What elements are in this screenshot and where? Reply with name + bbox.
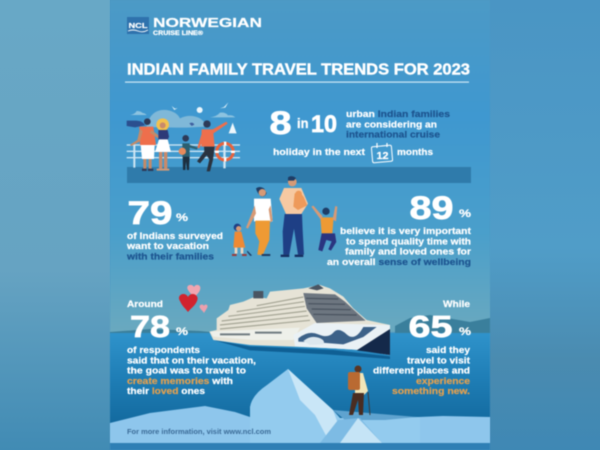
balcony lines xyxy=(220,297,357,329)
blurred left backdrop xyxy=(0,0,110,450)
hiker jacket xyxy=(355,373,368,395)
logo tagline: CRUISE LINE® xyxy=(153,30,204,37)
stat description: family and loved ones for xyxy=(345,246,471,258)
percent sign: % xyxy=(176,326,188,338)
clouds and coast xyxy=(147,110,207,128)
icon: hearts xyxy=(179,285,208,313)
stat: 78 percent xyxy=(127,299,256,397)
number 79: 79 xyxy=(128,195,172,231)
stat description: something new. xyxy=(392,386,470,397)
panel: infographic xyxy=(110,0,490,450)
number 8: 8 xyxy=(270,105,292,141)
stat description xyxy=(127,345,256,397)
stat description: months xyxy=(397,147,433,158)
boy jumping xyxy=(311,206,337,251)
hull wave artwork xyxy=(298,327,377,344)
illustration: cruise ship xyxy=(209,284,390,359)
illustration: parents and children xyxy=(232,176,337,257)
lifebuoy xyxy=(215,142,235,161)
stat description: of respondents xyxy=(127,345,200,356)
illustration: family on deck xyxy=(127,102,240,171)
number 78: 78 xyxy=(130,309,170,344)
While: While xyxy=(443,299,470,310)
lower promenade deck xyxy=(210,328,300,340)
illustration: iceberg xyxy=(110,369,490,443)
ship shadow on water xyxy=(213,340,390,359)
stat description xyxy=(273,109,450,158)
stat description xyxy=(327,226,472,268)
stat: 8 in 10 xyxy=(270,105,450,163)
stat description: travel to visit xyxy=(407,356,471,366)
stat description: international cruise xyxy=(346,130,440,140)
title: INDIAN FAMILY TRAVEL TRENDS FOR 2023 xyxy=(127,62,470,78)
stat description xyxy=(373,345,471,397)
Around: Around xyxy=(127,299,163,310)
dark bow xyxy=(357,329,390,355)
stat: 65 percent xyxy=(373,299,471,397)
iceberg main xyxy=(250,369,420,443)
stat description: their loved ones xyxy=(127,386,205,397)
stat description xyxy=(126,231,223,262)
stat description: are considering an xyxy=(346,120,437,130)
bottom strip xyxy=(110,443,490,450)
hiker head xyxy=(354,366,362,372)
ice foreground xyxy=(110,406,490,443)
stat description: to spend quality time with xyxy=(346,236,471,248)
dark upper decks xyxy=(303,293,366,323)
man pointing xyxy=(197,120,228,171)
sky background xyxy=(110,0,490,332)
woman in white xyxy=(155,118,171,171)
toddler girl xyxy=(232,224,247,256)
footer note: For more information, visit www.ncl.com xyxy=(127,427,271,436)
stat description: said they xyxy=(426,345,471,356)
lower facets xyxy=(320,418,382,443)
sea xyxy=(110,333,490,423)
in: in xyxy=(297,116,308,131)
percent sign: % xyxy=(176,212,188,224)
hiker legs xyxy=(349,393,364,415)
stat description: want to vacation xyxy=(126,241,209,252)
logo badge: NCL xyxy=(128,21,148,30)
logo name: NORWEGIAN xyxy=(153,15,262,30)
stat description: said that on their vacation, xyxy=(127,356,256,366)
stat description: holiday in the next xyxy=(273,147,366,158)
deck band xyxy=(127,167,471,183)
iceberg light facet xyxy=(288,369,345,443)
mother xyxy=(246,187,273,256)
stat description: with their families xyxy=(126,252,214,262)
stat description: experience xyxy=(416,376,470,387)
blurred right backdrop xyxy=(490,0,600,450)
stat description: urban Indian families xyxy=(346,109,450,120)
father and baby xyxy=(279,176,308,257)
hull xyxy=(293,323,390,355)
icon: calendar: 12 xyxy=(376,151,389,162)
ship crown xyxy=(253,284,324,298)
stat description: create memories with xyxy=(127,376,233,387)
number 65: 65 xyxy=(408,309,452,344)
stat description: the goal was to travel to xyxy=(127,366,246,377)
percent sign: % xyxy=(459,208,471,220)
stat description: an overall sense of wellbeing xyxy=(327,257,471,268)
superstructure xyxy=(209,285,390,355)
logo xyxy=(127,15,262,37)
distant hills xyxy=(110,315,490,336)
illustration: hiker xyxy=(348,366,370,415)
ledge shadow xyxy=(333,410,417,420)
hiker backpack xyxy=(348,372,360,390)
walking pole xyxy=(368,392,370,415)
stat: 79 percent xyxy=(126,195,223,262)
percent sign: % xyxy=(459,326,471,338)
stat description: different places and xyxy=(373,366,470,377)
stat: 89 percent xyxy=(327,190,472,268)
number 10: 10 xyxy=(311,111,337,138)
icon: calendar xyxy=(371,143,393,163)
man in orange xyxy=(130,118,161,171)
stat description: of Indians surveyed xyxy=(127,231,223,242)
railing xyxy=(127,142,240,168)
stat description: believe it is very important xyxy=(340,226,472,237)
number 89: 89 xyxy=(410,190,454,226)
child with backpack xyxy=(179,135,198,170)
